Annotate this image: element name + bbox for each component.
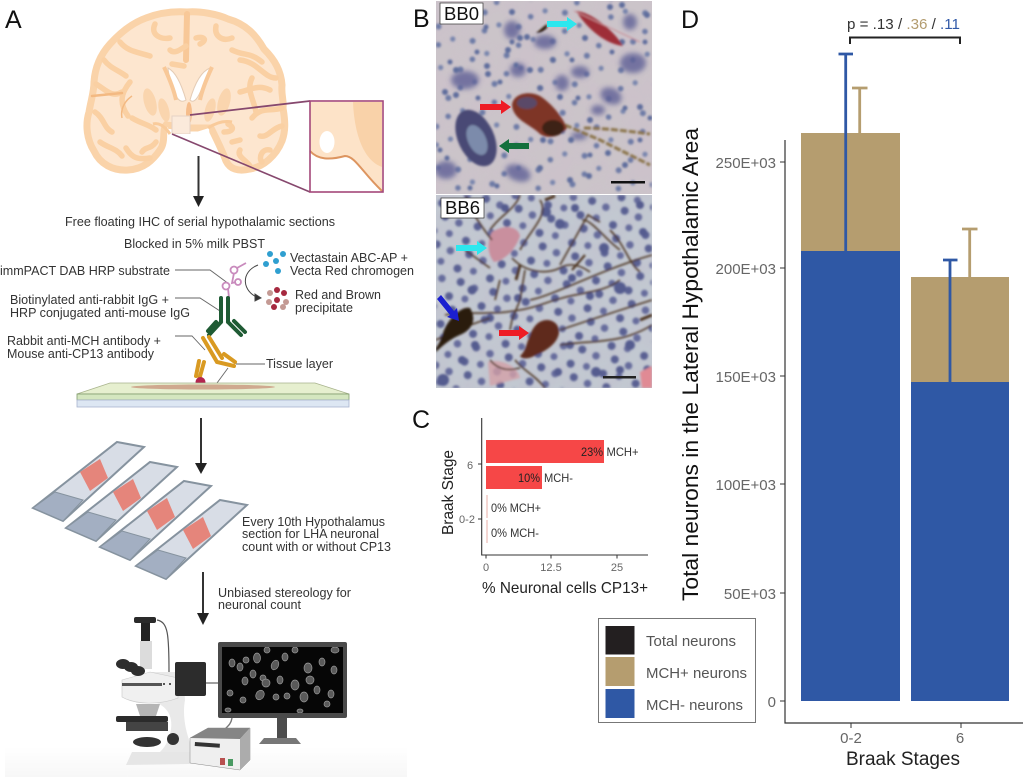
text: every 10th section: Every 10th Hypothalamus — [242, 515, 385, 529]
bar labels: 23% — [581, 445, 603, 459]
legend: MCH- neurons — [646, 698, 743, 714]
blue arrow — [437, 295, 459, 321]
bar labels — [491, 445, 638, 540]
arrow: sections to stereology — [197, 572, 209, 625]
red arrow — [480, 100, 511, 114]
axes — [482, 418, 648, 555]
icon: controller box — [190, 728, 250, 770]
ventricles — [168, 68, 210, 101]
panel letter B: B — [413, 5, 430, 33]
y tick labels: 250E+03 — [716, 155, 776, 172]
eyepieces — [116, 659, 145, 676]
icon: microscope — [116, 617, 206, 765]
label BB0: BB0 — [444, 4, 479, 24]
text: every 10th section: count with or without CP13 — [242, 540, 391, 554]
y tick labels: 0 — [768, 694, 776, 711]
y axis title: Total neurons in the Lateral Hypothalamic Area — [678, 127, 703, 601]
panel C: bar chart of CP13+ neurons — [412, 406, 648, 597]
panel B: micrographs — [413, 1, 652, 388]
micrograph BB6 — [436, 195, 652, 388]
x tick labels: 6 — [956, 730, 964, 747]
leader lines — [175, 270, 265, 383]
red arrow — [499, 326, 529, 340]
panel letter A: A — [5, 6, 22, 34]
axis ticks and tick labels — [459, 460, 623, 574]
brown neuron — [520, 320, 559, 358]
inset zoom lines — [190, 101, 310, 115]
label: primary antibodies: Rabbit anti-MCH antibody + — [7, 334, 161, 348]
icon: four serial slides — [33, 442, 247, 579]
brown process — [565, 125, 650, 165]
icon: antigen — [196, 377, 206, 387]
icon: blue reagent dots — [263, 251, 286, 274]
panel letter D: D — [681, 6, 699, 34]
head — [122, 672, 178, 703]
label: DAB substrate: immPACT DAB HRP substrate — [0, 264, 170, 278]
y tick labels — [716, 155, 785, 711]
slide 1 — [33, 442, 144, 521]
icon: HRP substrate — [222, 263, 246, 298]
legend — [598, 618, 756, 722]
dark neuron left — [436, 308, 473, 352]
scale bar — [603, 376, 636, 378]
label: secondary antibodies: HRP conjugated anti-mouse IgG — [10, 306, 190, 320]
green arrow — [499, 139, 529, 153]
label: primary antibodies: Mouse anti-CP13 antibody — [7, 347, 155, 361]
p-value label: p = .13 / .36 / .11 — [847, 16, 960, 33]
panel letter C: C — [412, 406, 430, 434]
cyan arrow — [456, 241, 487, 255]
axis ticks and tick labels: 25 — [611, 562, 623, 574]
y tick labels: 150E+03 — [716, 369, 776, 386]
bar: Braak 6 — [911, 277, 1009, 701]
y tick labels: 100E+03 — [716, 477, 776, 494]
inset box — [310, 101, 383, 192]
label: precipitate: Red and Brown — [295, 288, 381, 302]
bar labels: MCH+ — [606, 445, 638, 459]
panel A: IHC workflow — [0, 6, 414, 777]
y axis title: Braak Stage — [440, 450, 457, 535]
x tick labels — [840, 723, 964, 747]
label BB6: BB6 — [445, 198, 480, 218]
pink neuron — [488, 227, 520, 262]
cyan arrow — [547, 17, 577, 31]
text: IHC steps — [65, 215, 335, 251]
brown-red neuron — [512, 93, 567, 137]
error bars — [838, 54, 978, 382]
icon: precipitate dots — [266, 287, 289, 310]
label: Vectastain: Vecta Red chromogen — [290, 264, 414, 278]
red neuron — [576, 11, 623, 46]
text: every 10th section: section for LHA neuronal — [242, 527, 379, 541]
x axis title: Braak Stages — [846, 749, 960, 770]
connector cables — [206, 683, 232, 729]
x axis title: % Neuronal cells CP13+ — [482, 580, 648, 597]
significance bracket — [850, 38, 960, 44]
text: unbiased stereology: Unbiased stereology for — [218, 586, 351, 600]
icon: brain section with inset — [87, 12, 383, 192]
y tick labels: 200E+03 — [716, 261, 776, 278]
scale bar — [611, 181, 645, 184]
icon: primary antibody — [196, 337, 235, 380]
legend: MCH+ neurons — [646, 666, 747, 682]
icon: secondary antibody — [208, 298, 245, 335]
axis ticks and tick labels: 6 — [467, 460, 473, 472]
icon: monitor with neurons — [218, 642, 347, 744]
blue neuron — [454, 108, 498, 168]
label: Vectastain: Vectastain ABC-AP + — [290, 251, 408, 265]
text: unbiased stereology: neuronal count — [218, 598, 302, 612]
bar: Braak 0-2 — [801, 133, 900, 701]
y tick labels: 50E+03 — [724, 586, 776, 603]
label: precipitate: precipitate — [295, 301, 353, 315]
panel D: stacked bar chart of neuron totals — [598, 6, 1023, 770]
bar labels: MCH- — [544, 471, 573, 485]
axes — [785, 140, 1023, 723]
legend: Total neurons — [646, 634, 736, 650]
bar labels: 10% — [518, 471, 540, 485]
x tick labels: 0-2 — [840, 730, 862, 747]
arrow: brain to IHC — [193, 156, 204, 207]
brown debris — [536, 24, 547, 33]
text: IHC steps: Free floating IHC of serial hypothalamic sections — [65, 215, 335, 229]
text: IHC steps: Blocked in 5% milk PBST — [124, 237, 265, 251]
bars — [486, 440, 604, 543]
slide 4 — [136, 500, 247, 579]
icon: reaction arrow — [245, 265, 261, 301]
bar labels: 0% MCH+ — [491, 501, 541, 515]
micrograph BB0 — [435, 1, 652, 194]
body and arm — [150, 672, 194, 752]
floor shading — [5, 747, 407, 777]
arrow: slide to sections — [195, 418, 207, 474]
antibody diagram — [0, 251, 414, 407]
bar labels: 0% MCH- — [491, 526, 539, 540]
axis ticks and tick labels: 0-2 — [459, 514, 475, 526]
label: secondary antibodies: Biotinylated anti-rabbit IgG + — [10, 293, 169, 307]
label: tissue layer: Tissue layer — [266, 357, 333, 371]
slide 3 — [100, 481, 211, 560]
axis ticks and tick labels: 12.5 — [540, 562, 562, 574]
slide 2 — [66, 462, 177, 541]
fibres — [436, 195, 652, 388]
axis ticks and tick labels: 0 — [483, 562, 489, 574]
icon: microscope slide with tissue — [77, 383, 349, 407]
